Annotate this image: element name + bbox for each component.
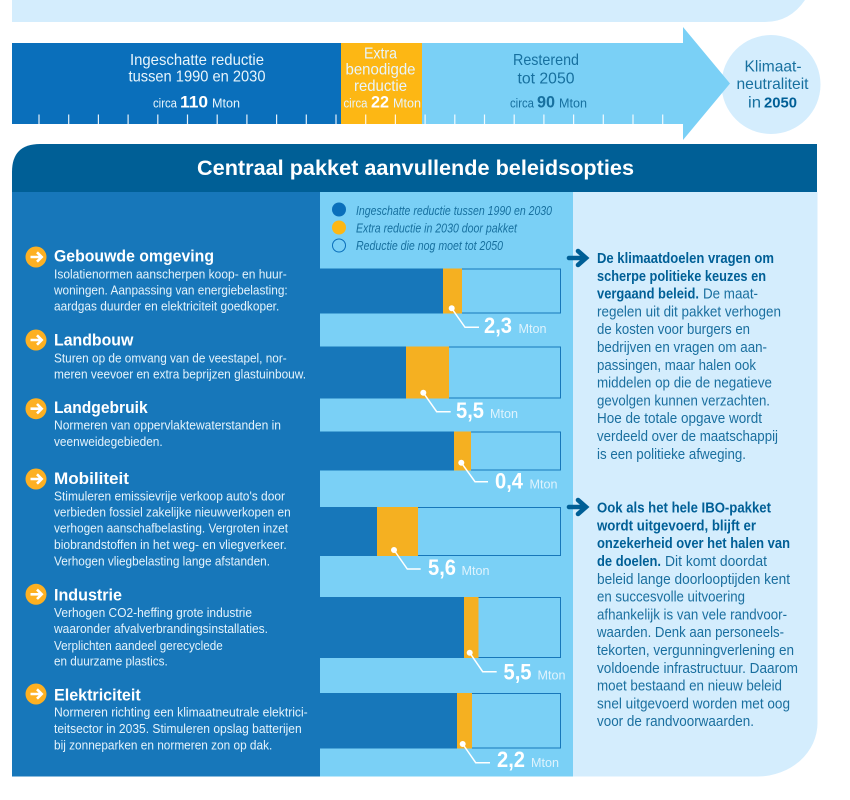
measure: Industrie: Industrie [54,586,122,605]
measure: Elektriciteit: teitsector in 2035. Stimuleren opslag batterijen [54,722,302,736]
measure: Industrie [26,584,268,669]
segment: ingeschatte reductie [12,43,341,124]
icon: arrow circle [26,584,46,605]
text block: IBO-pakket: wordt uitgevoerd, blijft er [596,518,756,534]
measure: Landgebruik [26,398,281,449]
measure: Gebouwde omgeving: Isolatienormen aanscherpen koop- en huur- [54,267,287,281]
segment: extra benodigde reductie: 22 [371,93,389,112]
segment: extra benodigde reductie: circa [344,97,368,111]
segment: ingeschatte reductie: tussen 1990 en 2030 [128,69,266,86]
measure: Industrie: Verhogen CO2-heffing grote industrie [54,606,252,620]
segment: resterend tot 2050: 90 [537,93,555,112]
measure: Landgebruik: Landgebruik [54,398,148,417]
bar: Gebouwde omgeving: 2,3 [484,313,512,338]
text block: IBO-pakket: voor de randvoorwaarden. [597,714,754,730]
panel: middle chart background [320,192,573,776]
text block: klimaatdoelen: is een politieke afweging. [597,447,746,463]
segment: extra benodigde reductie: reductie [354,78,407,95]
top panel remnant [12,0,805,22]
bar: Industrie: 5,5 [504,660,532,684]
bar: Landgebruik: 0,4 [495,468,524,494]
bar: Landgebruik [320,432,560,494]
measure: Mobiliteit: biobrandstoffen in het weg- en vliegverkeer. [54,538,287,552]
circle: klimaatneutraliteit: neutraliteit [736,76,809,93]
measure: Landgebruik: Normeren van oppervlaktewaterstanden in [54,418,281,432]
text block: klimaatdoelen: passingen, maar halen ook [597,358,757,374]
text block: IBO-pakket: waarden. Denk aan personeels- [596,625,784,641]
bar: Elektriciteit [320,693,560,772]
bar: Mobiliteit: Mton [462,564,490,578]
text block: IBO-pakket: snel uitgevoerd worden met oog [597,696,790,712]
bar: Gebouwde omgeving: Mton [518,322,547,336]
text block: IBO-pakket: Ook als het hele IBO-pakket [597,500,771,516]
icon: arrow circle [26,330,46,350]
text block: klimaatdoelen [597,251,781,463]
bar: Landbouw: Mton [490,407,518,421]
text block: IBO-pakket: afhankelijk is van vele randvoor- [597,608,787,624]
segment: resterend tot 2050: tot 2050 [518,70,575,87]
measure: Landbouw: Landbouw [54,331,134,350]
segment: resterend tot 2050 [422,27,730,140]
segment: resterend tot 2050: Resterend [513,52,579,69]
text block: IBO-pakket: de doelen. [597,554,661,570]
text block: IBO-pakket: en succesvolle uitvoering [597,590,745,606]
measure: Gebouwde omgeving: Gebouwde omgeving [54,247,214,266]
text block: klimaatdoelen: De maat- [703,286,758,302]
measure: Landbouw [26,330,306,381]
text block: IBO-pakket: tekorten, vergunningverlening en [597,643,794,659]
header band with title [12,144,817,192]
text block: IBO-pakket [596,500,798,730]
bar: Industrie: Mton [538,668,566,682]
segment: extra benodigde reductie [341,43,422,124]
legend [332,202,552,253]
measure: Elektriciteit: Normeren richting een klimaatneutrale elektrici- [54,706,308,720]
text block: klimaatdoelen: de kosten voor burgers en [597,322,750,338]
circle: klimaatneutraliteit: 2050 [764,94,797,111]
icon: arrow to second text block [569,500,586,514]
bar: Landgebruik: Mton [530,478,558,492]
measure: Industrie: en duurzame plastics. [54,655,168,669]
timeline arrow [12,27,730,140]
icon: arrow circle [26,246,46,268]
icon: arrow circle [26,468,46,490]
segment: extra benodigde reductie: Mton [393,97,421,111]
measure: Gebouwde omgeving: woningen. Aanpassing van energiebelasting: [53,284,288,298]
bar: Elektriciteit: Mton [531,756,559,770]
circle: klimaatneutraliteit: Klimaat- [744,58,802,75]
segment: ingeschatte reductie: 110 [180,93,208,112]
text block: klimaatdoelen: bedrijven en vragen om aan- [597,340,767,356]
text block: IBO-pakket: moet bestaand en nieuw beleid [597,678,782,694]
segment: resterend tot 2050: Mton [559,97,587,111]
segment: resterend tot 2050: circa [510,97,534,111]
measure: Elektriciteit: bij zonneparken en normeren zon op dak. [54,739,272,753]
bar: Elektriciteit: 2,2 [497,747,525,772]
measure: Elektriciteit [26,684,308,753]
panel: left measures background [12,192,320,776]
bar: Landbouw [320,346,560,423]
bar: Landbouw: 5,5 [456,398,484,423]
text block: IBO-pakket: onzekerheid over het halen van [597,536,790,552]
bar: Mobiliteit: 5,6 [428,555,456,580]
icon: arrow to first text block [569,251,586,265]
bar: Gebouwde omgeving [320,268,560,338]
circle: klimaatneutraliteit [722,35,820,134]
legend: Reductie die nog moet tot 2050 [356,239,503,253]
segment: ingeschatte reductie: circa [153,97,177,111]
text block: klimaatdoelen: Hoe de totale opgave wordt [597,411,762,427]
text block: klimaatdoelen: De klimaatdoelen vragen om [597,251,774,267]
measure: Gebouwde omgeving: aardgas duurder en elektriciteit goedkoper. [54,299,279,313]
segment: ingeschatte reductie: Mton [212,97,240,111]
text block: IBO-pakket: voldoende infrastructuur. Daarom [597,661,798,677]
circle: klimaatneutraliteit: in [748,94,761,111]
measure: Industrie: Verplichten aandeel gerecyclede [54,639,223,653]
text block: klimaatdoelen: middelen op die de negatieve [597,376,772,392]
measure: Mobiliteit [26,468,291,569]
segment: extra benodigde reductie: benodigde [346,62,416,79]
measure: Landbouw: Sturen op de omvang van de veestapel, nor- [54,351,287,365]
legend: Ingeschatte reductie tussen 1990 en 2030 [356,204,552,218]
icon: arrow circle [26,684,46,704]
bar: Industrie [320,597,566,684]
measure: Gebouwde omgeving [26,246,288,313]
text block: klimaatdoelen: verdeeld over de maatschappij [597,429,778,445]
measure: Mobiliteit: verbieden fossiel zakelijke nieuwverkopen en [54,506,291,520]
measure: Mobiliteit: Mobiliteit [54,469,129,488]
measure: Elektriciteit: Elektriciteit [54,686,141,705]
text block: klimaatdoelen: scherpe politieke keuzes en [597,269,766,285]
text block: klimaatdoelen: regelen uit dit pakket verhogen [597,304,781,320]
text block: klimaatdoelen: vergaand beleid. [597,286,699,302]
segment: extra benodigde reductie: Extra [364,45,397,62]
measure: Mobiliteit: Stimuleren emissievrije verkoop auto's door [54,490,285,504]
text block: IBO-pakket: Dit komt doordat [665,554,767,570]
text block: IBO-pakket: beleid lange doorlooptijden kent [597,572,790,588]
panel: right text background [573,192,818,776]
measure: Industrie: waaronder afvalverbrandingsinstallaties. [53,622,268,636]
text block: klimaatdoelen: gevolgen kunnen verzachten. [597,394,770,410]
measure: Mobiliteit: verhogen aanschafbelasting. Vergroten inzet [54,522,288,536]
measure: Landbouw: meren veevoer en extra beprijzen glastuinbouw. [54,367,306,381]
bar: Mobiliteit [320,507,560,580]
measure: Landgebruik: veenweidegebieden. [54,435,163,449]
measure: Mobiliteit: Verhogen vliegbelasting lange afstanden. [54,555,270,569]
segment: ingeschatte reductie: Ingeschatte reductie [130,52,264,69]
header band with title: Centraal pakket aanvullende beleidsopties [197,157,634,180]
icon: arrow circle [26,398,46,419]
legend: Extra reductie in 2030 door pakket [356,222,517,236]
